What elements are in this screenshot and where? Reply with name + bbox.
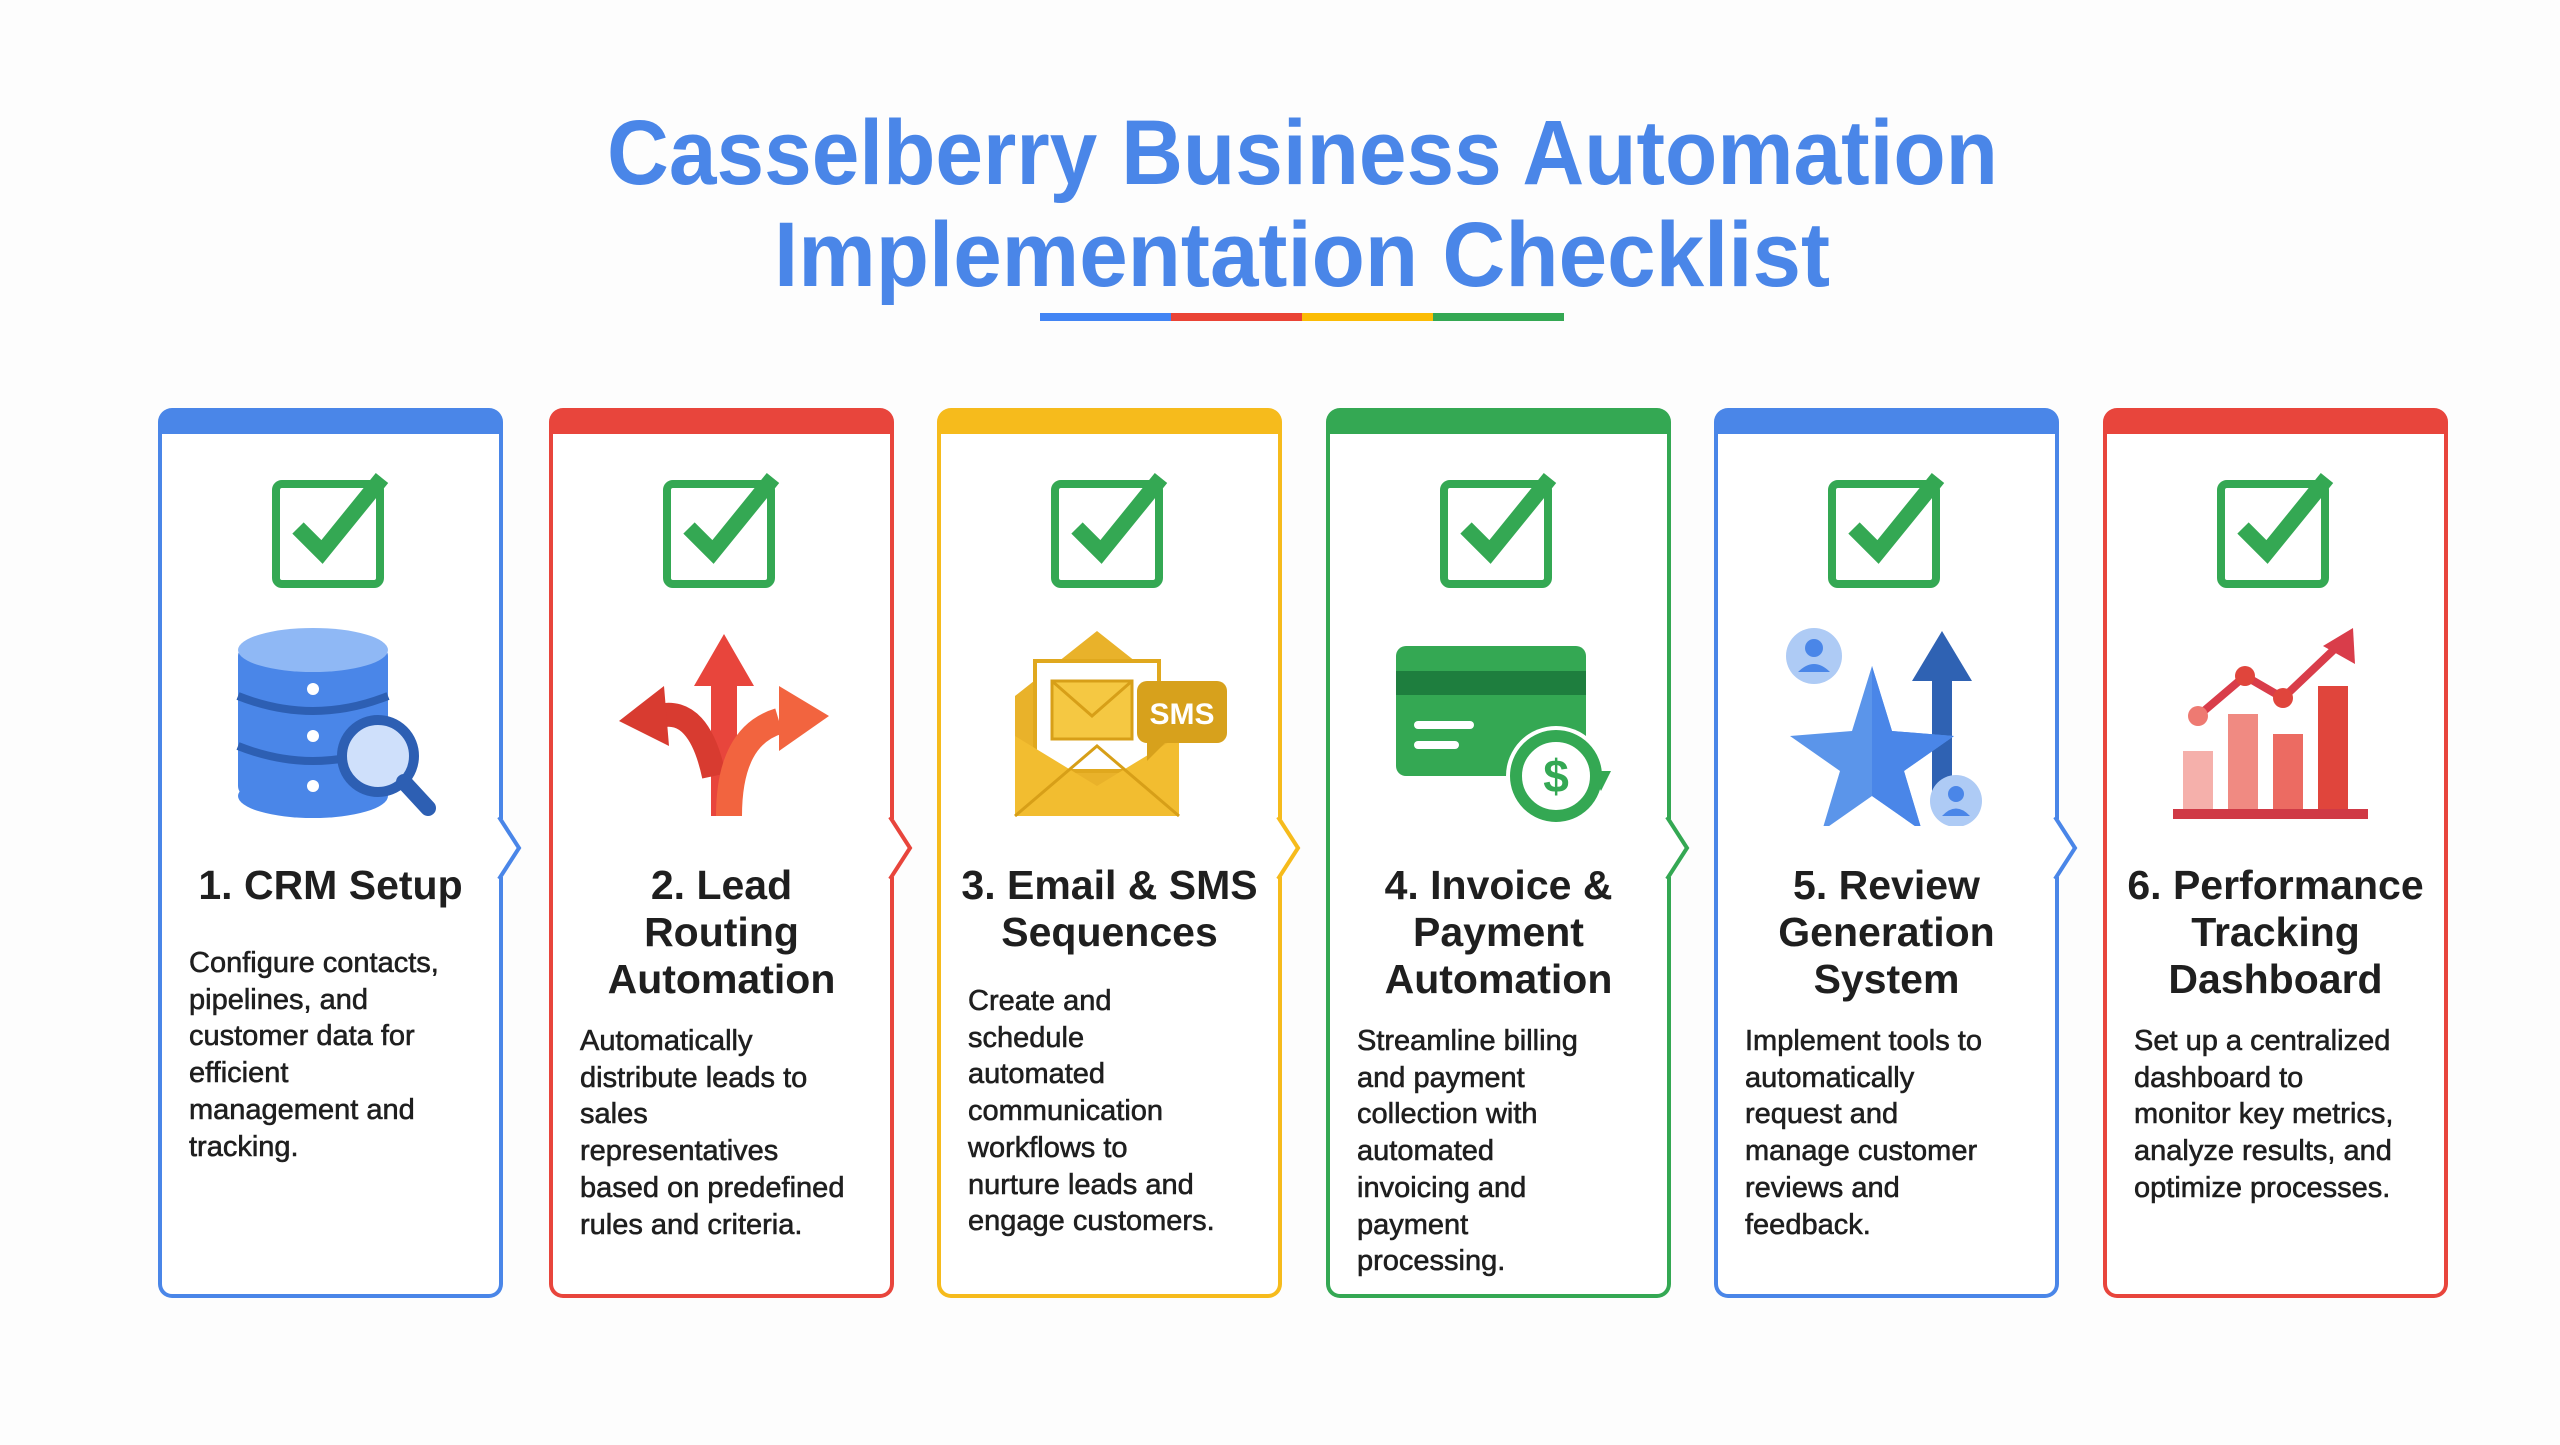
heading: Automation [608, 956, 835, 1002]
title [607, 102, 1998, 306]
body text [580, 1025, 844, 1241]
body text: processing. [1357, 1245, 1505, 1277]
card 5: Review Generation [1714, 408, 2059, 1298]
body text: dashboard to [2134, 1062, 2303, 1094]
icon: star, people, arrow [1786, 628, 1982, 826]
arrow [1665, 817, 1690, 879]
body text: feedback. [1745, 1209, 1871, 1241]
body text: Configure contacts, [189, 947, 439, 979]
heading [2127, 862, 2424, 1002]
icon: checkbox [1440, 473, 1556, 588]
heading [1385, 862, 1612, 1002]
body text: engage customers. [968, 1205, 1215, 1237]
arrow [888, 817, 912, 879]
heading: Automation [1385, 956, 1612, 1002]
body text: sales [580, 1098, 648, 1130]
body text: payment [1357, 1209, 1468, 1241]
icon: split arrows [619, 634, 829, 816]
title: Casselberry Business Automation [607, 102, 1998, 204]
body text: optimize processes. [2134, 1172, 2390, 1204]
body text: reviews and [1745, 1172, 1900, 1204]
heading: Dashboard [2168, 956, 2383, 1002]
body text: Set up a centralized [2134, 1025, 2390, 1057]
card 4: Invoice & Payment [1326, 408, 1671, 1298]
body text: Streamline billing [1357, 1025, 1578, 1057]
heading: 1. CRM Setup [198, 862, 463, 908]
heading: 3. Email & SMS [961, 862, 1258, 908]
icon: checkbox [1051, 473, 1168, 588]
arrow [497, 817, 522, 879]
body text: and payment [1357, 1062, 1525, 1094]
body text: invoicing and [1357, 1172, 1526, 1204]
body text: representatives [580, 1135, 778, 1167]
heading: Generation [1778, 909, 1995, 955]
icon: card and payment [1396, 646, 1611, 822]
heading: Routing [644, 909, 799, 955]
body text: automatically [1745, 1062, 1914, 1094]
heading: Sequences [1001, 909, 1218, 955]
title: Implementation Checklist [774, 204, 1830, 306]
heading: 6. Performance [2127, 862, 2424, 908]
body text: schedule [968, 1022, 1084, 1054]
body text [2134, 1025, 2393, 1204]
body text: based on predefined [580, 1172, 844, 1204]
heading: Payment [1413, 909, 1584, 955]
arrow [1276, 817, 1300, 879]
heading [1778, 862, 1995, 1002]
icon: checkbox [2217, 473, 2334, 588]
body text: communication [968, 1095, 1163, 1127]
body text: tracking. [189, 1131, 299, 1163]
icon: checkbox [272, 473, 388, 588]
card 6: Performance Tracking [2103, 408, 2448, 1298]
heading [961, 862, 1258, 955]
card 2: Lead Routing [549, 408, 894, 1298]
body text: customer data for [189, 1020, 415, 1052]
body text: Create and [968, 985, 1112, 1017]
arrow [2053, 817, 2078, 879]
icon: card and payment: $ [1543, 750, 1569, 802]
body text: management and [189, 1094, 415, 1126]
body text: pipelines, and [189, 984, 368, 1016]
body text [968, 985, 1215, 1237]
title underline [1040, 313, 1564, 321]
body text: manage customer [1745, 1135, 1977, 1167]
card 1: CRM Setup [158, 408, 503, 1298]
card 3: Email & SMS [937, 408, 1282, 1298]
heading [608, 862, 835, 1002]
body text: workflows to [968, 1132, 1128, 1164]
heading: System [1814, 956, 1959, 1002]
body text: Automatically [580, 1025, 752, 1057]
body text: request and [1745, 1098, 1898, 1130]
icon: bar chart [2173, 628, 2368, 819]
body text: analyze results, and [2134, 1135, 2392, 1167]
heading: 2. Lead [651, 862, 792, 908]
icon: checkbox [663, 473, 780, 588]
icon: envelope with SMS: SMS [1149, 698, 1215, 731]
body text: distribute leads to [580, 1062, 807, 1094]
body text: monitor key metrics, [2134, 1098, 2393, 1130]
body text: rules and criteria. [580, 1209, 802, 1241]
body text: collection with [1357, 1098, 1538, 1130]
body text: efficient [189, 1057, 288, 1089]
icon: envelope with SMS [1014, 631, 1227, 818]
body text: nurture leads and [968, 1169, 1194, 1201]
body text: Implement tools to [1745, 1025, 1982, 1057]
heading: 4. Invoice & [1385, 862, 1612, 908]
heading: Tracking [2191, 909, 2360, 955]
icon: checkbox [1828, 473, 1944, 588]
body text [1357, 1025, 1578, 1277]
body text: automated [1357, 1135, 1494, 1167]
icon: database [236, 628, 436, 818]
body text [1745, 1025, 1982, 1241]
heading: 5. Review [1793, 862, 1980, 908]
body text [189, 947, 439, 1163]
body text: automated [968, 1058, 1105, 1090]
